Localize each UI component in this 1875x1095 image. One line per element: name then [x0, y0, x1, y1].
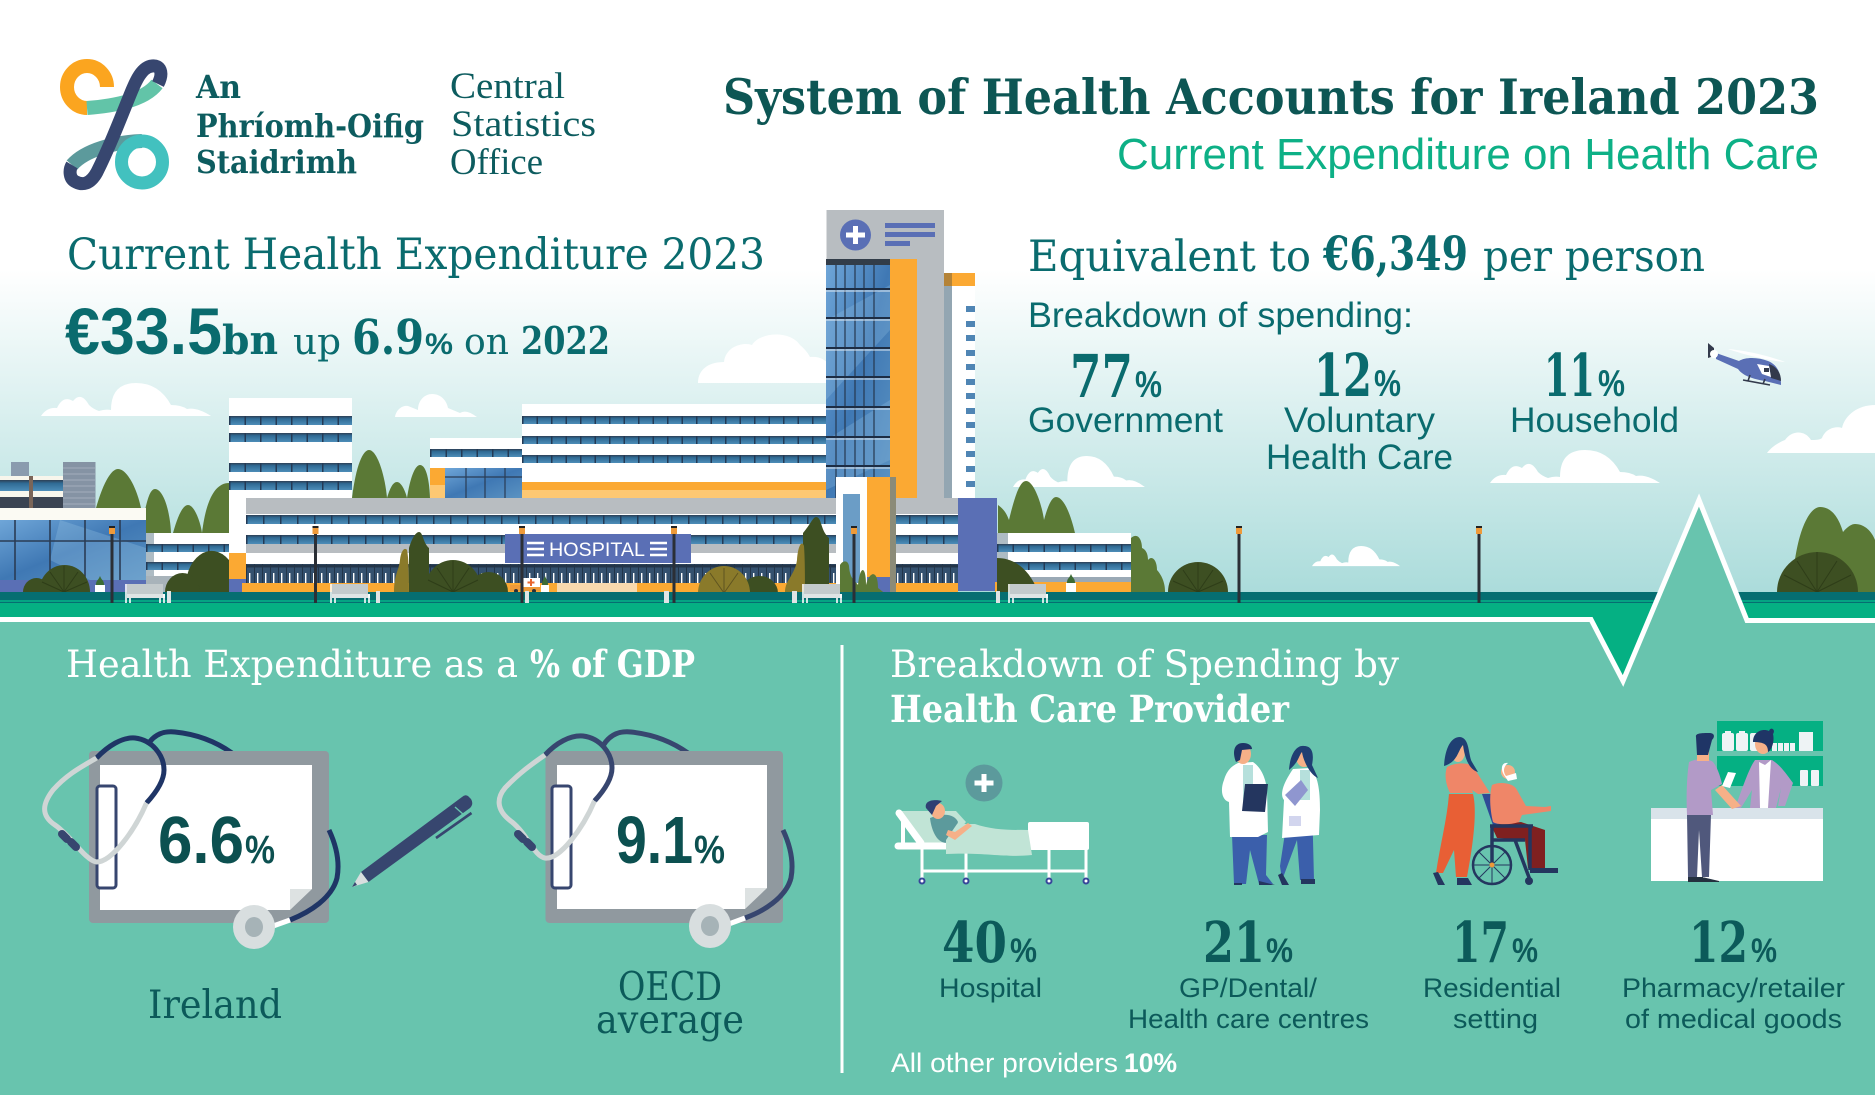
stethoscope [45, 738, 338, 949]
mid building [430, 438, 522, 498]
icon: right menu lines [650, 543, 667, 555]
label: Ireland: Ireland [148, 983, 282, 1028]
logo English name [450, 66, 596, 183]
heading: per person: €6,349 [1322, 227, 1468, 282]
icon: pen [352, 795, 472, 887]
ground [0, 592, 1875, 703]
logo English name: Central [450, 66, 565, 107]
stat: residential 17%: setting [1453, 1004, 1538, 1034]
stat: GP dental 21%: % [1266, 932, 1293, 970]
headline figure: 33.5bn up 6.9% on 2022: on [464, 322, 509, 363]
note: all other providers: All other providers [891, 1048, 1118, 1078]
clipboard: OECD average [499, 732, 792, 948]
right low building [995, 533, 1131, 592]
pharmacist [1735, 729, 1793, 808]
stat: household 11% [1510, 341, 1679, 440]
stat: household 11%: Household [1510, 401, 1679, 440]
heading: health expenditure as percent of GDP: Health Expenditure as a [66, 643, 518, 686]
value: % [245, 828, 275, 872]
stat: GP dental 21%: 21 [1203, 910, 1265, 976]
left wing building [146, 533, 229, 592]
clipboard clip [552, 786, 571, 888]
stethoscope [499, 736, 792, 948]
headline figure: 33.5bn up 6.9% on 2022: bn [222, 317, 278, 364]
stat: pharmacy 12%: Pharmacy/retailer [1622, 973, 1845, 1003]
stat: hospital 40%: 40 [942, 910, 1007, 976]
main hospital block [242, 498, 997, 592]
value: 6.6 [158, 803, 244, 878]
benches and bollards [126, 584, 1048, 603]
value: % [694, 828, 725, 872]
stat: household 11%: % [1598, 363, 1625, 404]
label: OECD average [596, 965, 744, 1043]
divider [840, 645, 844, 1073]
stat: residential 17%: 17 [1452, 910, 1509, 976]
lower panel with heartbeat line [0, 500, 1875, 1095]
icon: hospital bed with patient [898, 764, 1089, 884]
counter [1651, 808, 1823, 881]
customer [1687, 733, 1741, 882]
logo Irish name: An [195, 68, 241, 106]
hospital sign [505, 534, 691, 563]
label: OECD average: OECD [618, 965, 722, 1010]
headline figure: 33.5bn up 6.9% on 2022: % [425, 328, 453, 361]
heading: breakdown by provider: Breakdown of Spending by [890, 643, 1399, 686]
stat: voluntary health care 12% [1266, 341, 1453, 477]
stat: residential 17%: Residential [1423, 973, 1561, 1003]
stat: residential 17% [1423, 910, 1561, 1034]
stat: pharmacy 12%: % [1751, 932, 1777, 970]
tall white block [229, 398, 352, 592]
icon: plus circle [966, 764, 1002, 802]
hospital tower [826, 210, 975, 498]
icon: two doctors [1222, 743, 1320, 885]
note: all other providers: 10% [1124, 1048, 1177, 1078]
stat: government 77%: 77 [1070, 342, 1133, 411]
stat: government 77% [1028, 342, 1223, 440]
heading: health expenditure as percent of GDP: % of GDP [530, 642, 695, 686]
far-left building [0, 462, 151, 592]
street lamps [109, 526, 1482, 603]
stat: voluntary health care 12%: 12 [1314, 341, 1372, 410]
clouds [41, 334, 1875, 566]
tower entrance [836, 477, 896, 592]
stat: household 11%: 11 [1544, 341, 1595, 410]
heading: per person: Equivalent to [1028, 232, 1311, 282]
headline figure: 33.5bn up 6.9% on 2022: 6.9 [352, 310, 424, 366]
sign text: HOSPITAL [549, 540, 645, 561]
logo: Central Statistics Office [67, 66, 596, 184]
icon: wheelchair with carer [1433, 737, 1558, 885]
stat: pharmacy 12% [1622, 910, 1845, 1034]
logo Irish name: Phríomh-Oifig [196, 107, 424, 145]
stat: GP dental 21%: Health care centres [1128, 1004, 1369, 1034]
clipboard: Ireland [45, 732, 338, 949]
stat: voluntary health care 12%: % [1374, 363, 1401, 404]
stat: government 77%: % [1135, 364, 1162, 405]
stat: voluntary health care 12%: Voluntary [1284, 401, 1436, 440]
potted plants [95, 574, 1076, 592]
helicopter [1708, 343, 1785, 385]
subheading: breakdown of spending: Breakdown of spending: [1028, 296, 1413, 335]
shelves with medicines [1717, 721, 1823, 786]
ambulance [510, 578, 540, 593]
tower sign with plus icon [826, 210, 944, 259]
background sky [0, 0, 1875, 600]
background trees [96, 450, 1875, 592]
subtitle: Current Expenditure on Health Care [1117, 130, 1819, 179]
stat: residential 17%: % [1512, 932, 1538, 970]
headline figure: 33.5bn up 6.9% on 2022: up [293, 322, 341, 363]
icon: left menu lines [527, 543, 544, 555]
logo Irish name: Staidrimh [196, 143, 357, 181]
logo Irish name [195, 68, 424, 181]
long upper building [522, 404, 826, 498]
heading: per person: per person [1483, 232, 1705, 282]
stat: GP dental 21% [1128, 910, 1369, 1034]
logo English name: Statistics [451, 104, 596, 145]
heading: per person [1028, 227, 1705, 282]
label: OECD average: average [596, 998, 744, 1043]
clipboard clip [97, 786, 116, 888]
stat: pharmacy 12%: of medical goods [1625, 1004, 1842, 1034]
stat: GP dental 21%: GP/Dental/ [1179, 973, 1318, 1003]
stat: government 77%: Government [1028, 401, 1223, 440]
value: 9.1 [616, 803, 693, 878]
logo mark [67, 66, 162, 184]
headline figure: 33.5bn up 6.9% on 2022 [65, 294, 610, 368]
heading: breakdown by provider: Health Care Provider [890, 687, 1289, 731]
heading: current health expenditure: Current Health Expenditure 2023 [67, 230, 765, 280]
stat: hospital 40%: % [1010, 932, 1037, 970]
heading: breakdown by provider [890, 643, 1399, 731]
stat: hospital 40% [939, 910, 1042, 1003]
headline figure: 33.5bn up 6.9% on 2022: €33.5 [65, 294, 222, 368]
headline figure: 33.5bn up 6.9% on 2022: 2022 [521, 318, 610, 363]
logo English name: Office [450, 142, 543, 183]
stat: voluntary health care 12%: Health Care [1266, 438, 1453, 477]
stat: hospital 40%: Hospital [939, 973, 1042, 1003]
stat: pharmacy 12%: 12 [1689, 910, 1748, 976]
icon: pharmacy counter [1651, 721, 1823, 882]
shrubs and foreground trees [23, 517, 1858, 595]
